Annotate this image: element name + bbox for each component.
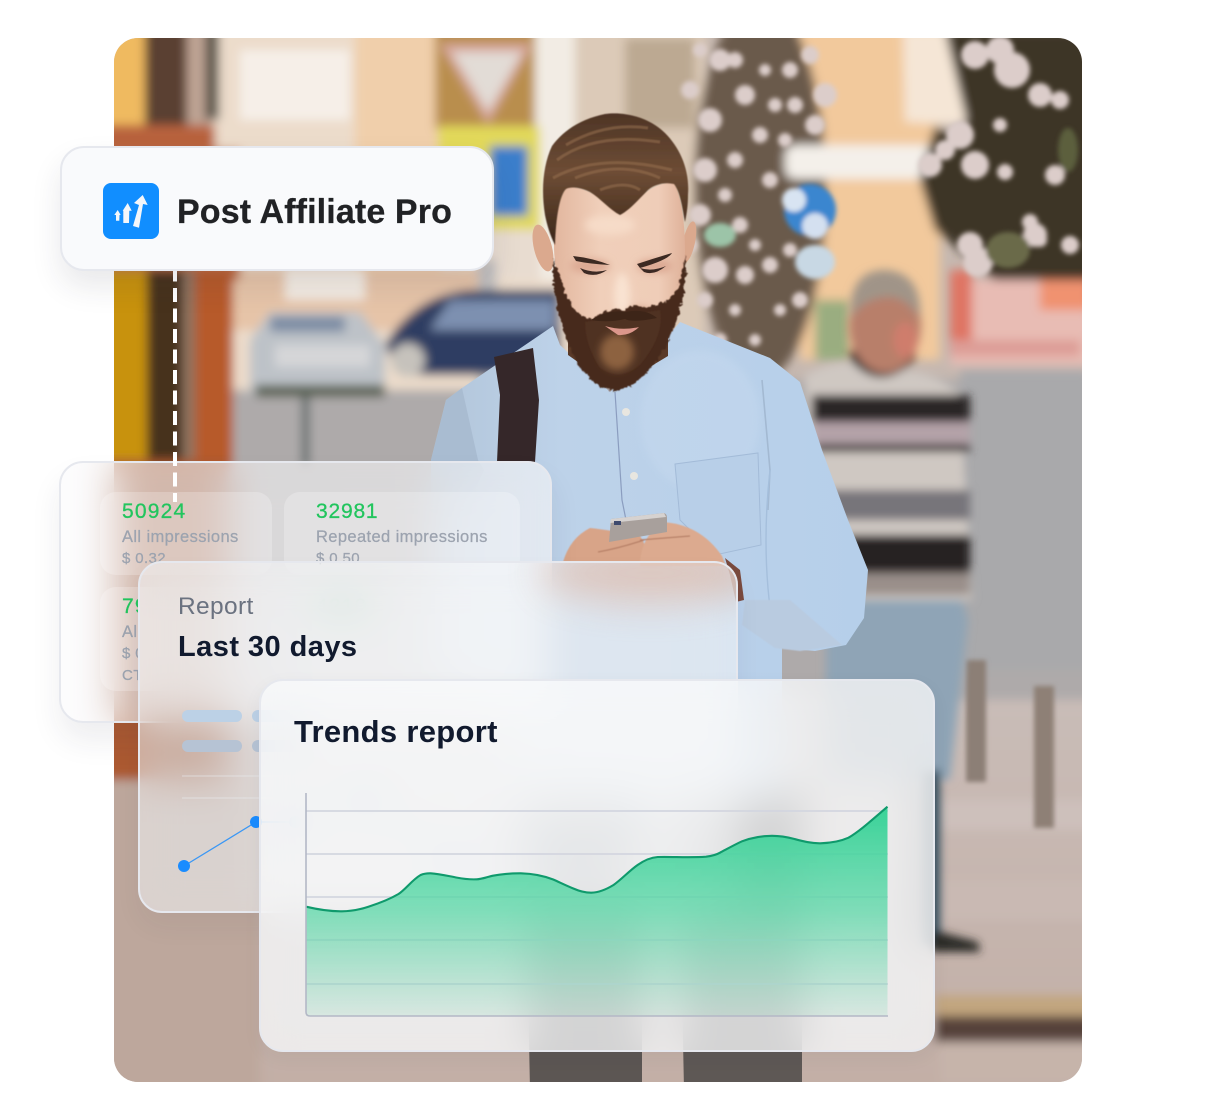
trousers bbox=[524, 790, 642, 1090]
dashed connector line bbox=[173, 271, 177, 502]
report heading: Last 30 days bbox=[178, 631, 358, 663]
pavement details bbox=[947, 806, 1082, 824]
shirt placket and pocket bbox=[614, 392, 626, 518]
panel: Post Affiliate Pro logo bbox=[60, 146, 494, 271]
main man bbox=[430, 113, 868, 1090]
shirt bbox=[430, 322, 868, 800]
left storefront columns bbox=[114, 38, 152, 131]
area chart bbox=[305, 793, 888, 1017]
report label: Report bbox=[178, 593, 254, 620]
phone bbox=[609, 513, 667, 542]
tree foliage bbox=[681, 36, 1079, 347]
face shading bbox=[570, 215, 673, 317]
panel: impressions stats bbox=[59, 461, 552, 723]
shoulder strap bbox=[494, 348, 539, 462]
watch bbox=[725, 558, 744, 602]
bollards bbox=[966, 660, 986, 782]
photo: man with phone on a street bbox=[90, 38, 1082, 1082]
beard bbox=[553, 255, 686, 391]
blue road sign bbox=[784, 184, 836, 236]
stat card: all impressions: 50924 bbox=[122, 500, 186, 523]
ears bbox=[532, 224, 554, 272]
stat card: all impressions bbox=[100, 492, 272, 575]
stat card: all clicks bbox=[100, 587, 272, 691]
brand name: Post Affiliate Pro bbox=[177, 193, 452, 231]
eyes and brows bbox=[573, 256, 610, 265]
stat card: repeated impressions bbox=[284, 492, 520, 575]
hands bbox=[563, 522, 726, 566]
stat card: all impressions: $ 0.32 bbox=[122, 550, 166, 567]
older man in striped sweater bbox=[805, 270, 980, 952]
neck bbox=[568, 338, 668, 366]
warm tint from the hands behind the glass bbox=[540, 543, 760, 603]
stat card: repeated impressions: 32981 bbox=[316, 500, 378, 523]
stat card: repeated clicks: 4210 bbox=[316, 595, 368, 618]
panel: trends report bbox=[259, 679, 935, 1052]
cuff bbox=[742, 600, 842, 651]
icon: logo arrows bbox=[103, 183, 159, 239]
report mini chart bbox=[178, 710, 278, 872]
panel: report bbox=[138, 561, 738, 913]
stat card: repeated clicks bbox=[284, 587, 520, 691]
trends heading: Trends report bbox=[294, 714, 498, 749]
stat card: repeated impressions: $ 0.50 bbox=[316, 550, 360, 567]
cars bbox=[385, 290, 560, 375]
stat card: all impressions: All impressions bbox=[122, 528, 239, 546]
hair bbox=[543, 113, 688, 245]
stat card: repeated impressions: Repeated impressions bbox=[316, 528, 488, 546]
face bbox=[554, 184, 685, 319]
